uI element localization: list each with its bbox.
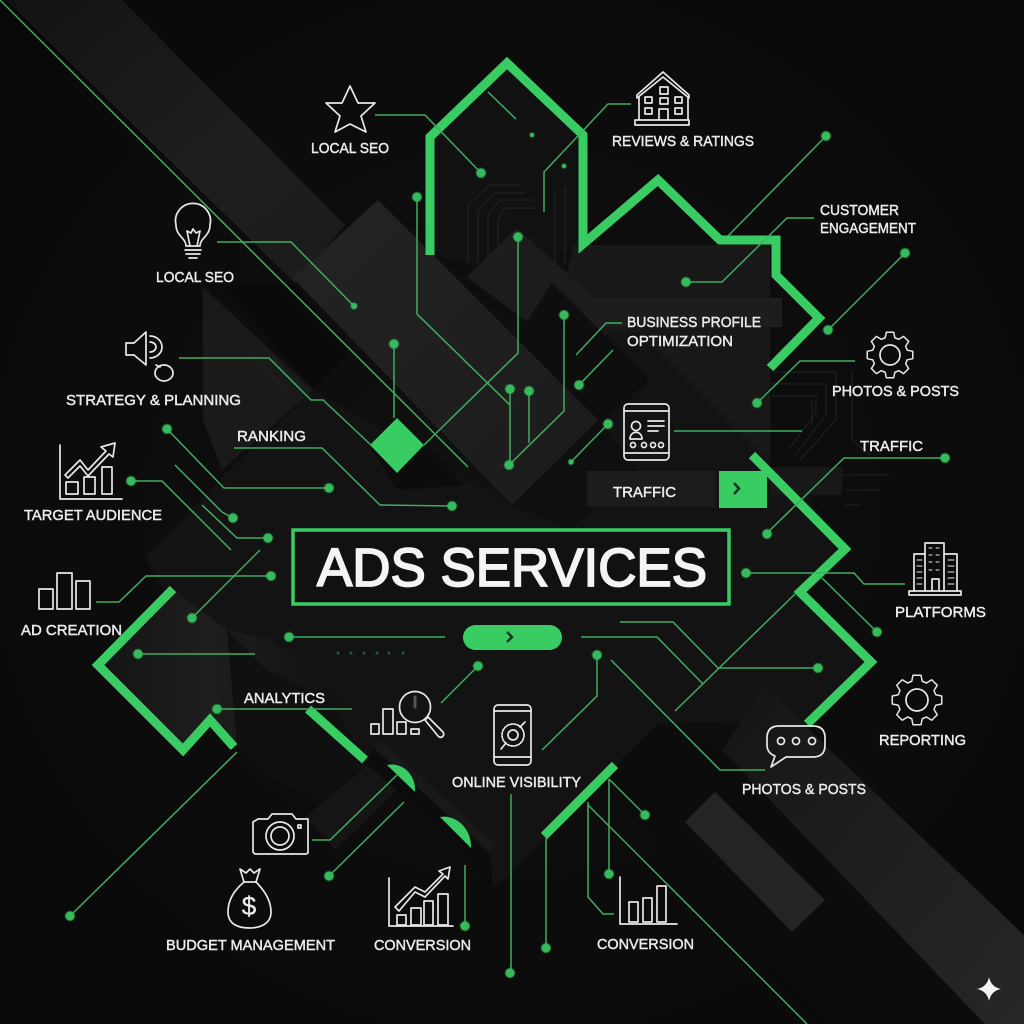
label: conversion right: CONVERSION	[597, 936, 694, 953]
connector: traffic right	[762, 454, 950, 538]
icon: bars	[39, 573, 90, 609]
connector: gear photos	[752, 361, 855, 408]
connector: left diagonal	[188, 550, 260, 622]
green half circle accents	[387, 765, 471, 848]
label: business profile optimization: OPTIMIZATION	[627, 333, 733, 350]
connector: camera	[312, 775, 397, 840]
label: local seo top: LOCAL SEO	[311, 140, 389, 157]
connector: customer engagement	[682, 218, 814, 286]
faint circuit traces	[240, 185, 890, 505]
label: traffic right: TRAFFIC	[860, 438, 923, 455]
connector: bottom vertical	[506, 794, 514, 978]
label: business profile optimization	[627, 314, 761, 350]
label: online visibility: ONLINE VISIBILITY	[452, 774, 581, 791]
connector: centre nodes	[504, 310, 568, 470]
green frame: right outline	[752, 455, 871, 724]
icon: light bulb	[176, 203, 210, 258]
icon: gear reporting	[892, 675, 942, 725]
label: reviews and ratings: REVIEWS & RATINGS	[612, 133, 754, 150]
icon: buildings	[909, 543, 961, 595]
connector: tablet left	[568, 420, 612, 464]
label: traffic bar: TRAFFIC	[613, 484, 676, 501]
icon: speaker and mouse	[126, 332, 173, 381]
icon: money bag	[228, 869, 271, 928]
connector: business profile	[574, 323, 622, 390]
green pill	[463, 625, 562, 650]
title: ADS SERVICES	[317, 538, 707, 598]
label: platforms: PLATFORMS	[895, 604, 986, 621]
label: strategy and planning: STRATEGY & PLANNING	[66, 392, 241, 409]
icon: magnifier chart	[371, 692, 444, 737]
label: conversion left: CONVERSION	[374, 937, 471, 954]
connector: top right	[728, 132, 830, 236]
icon: conversion growth chart	[389, 867, 453, 926]
dotted row	[336, 652, 404, 654]
connector: diamond top	[390, 340, 398, 418]
connector: left frame inner	[134, 650, 255, 658]
icon: camera	[253, 814, 308, 854]
connector: ranking	[234, 448, 456, 510]
connector: bottom left	[66, 752, 237, 920]
connector: lower diagonal	[324, 802, 404, 880]
connector: bulb	[217, 242, 357, 309]
connector: pill left	[284, 632, 445, 642]
connector: tablet	[674, 430, 802, 432]
connector: diamond right	[424, 232, 522, 445]
connector: target audience	[126, 465, 272, 550]
label: reporting: REPORTING	[879, 732, 966, 749]
connector: conversion	[460, 865, 470, 930]
label: business profile optimization: BUSINESS PROFILE	[627, 314, 761, 331]
connector: platforms	[742, 568, 905, 636]
connector: star	[375, 115, 486, 178]
icon: chat bubble	[767, 726, 825, 767]
title box	[293, 530, 729, 604]
connector: bottom frame verticals	[588, 779, 807, 1024]
icon: star	[326, 86, 375, 132]
green frame: bottom segment	[544, 765, 615, 836]
icon: gear photos	[867, 332, 913, 378]
traffic bar	[587, 471, 767, 508]
label: ranking: RANKING	[237, 428, 306, 445]
label: budget management: BUDGET MANAGEMENT	[166, 937, 335, 954]
long diagonal line	[0, 0, 468, 467]
label: analytics: ANALYTICS	[244, 690, 325, 707]
connector: photos and posts bottom	[611, 660, 765, 770]
icon: bar chart	[620, 877, 677, 924]
label: local seo left: LOCAL SEO	[156, 269, 234, 286]
label: photos and posts bottom: PHOTOS & POSTS	[742, 781, 866, 798]
label: ad creation: AD CREATION	[21, 622, 122, 639]
green frame: left outline	[98, 589, 234, 750]
label: customer engagement: CUSTOMER	[820, 202, 899, 219]
dollar sign: $	[242, 891, 257, 921]
icon: growth chart	[60, 443, 122, 499]
house inner details	[488, 92, 566, 168]
icon: house	[635, 72, 689, 125]
connector: magnifier	[441, 662, 482, 703]
connector: upper right	[824, 248, 910, 334]
icon: tablet profile	[624, 404, 669, 460]
label: customer engagement	[820, 202, 916, 237]
label: target audience: TARGET AUDIENCE	[24, 507, 162, 524]
connector: reviews	[544, 104, 631, 212]
icon: sparkle	[977, 977, 1001, 1001]
green frame: top house outline	[430, 63, 819, 368]
connector: pill right	[581, 594, 822, 711]
connector: phone	[542, 650, 602, 750]
connector: bottom frame left	[542, 836, 550, 952]
connector: centre left vertical	[412, 192, 510, 405]
label: photos and posts right: PHOTOS & POSTS	[832, 383, 959, 400]
green frame: analytics segment	[308, 709, 365, 760]
connector: speaker	[179, 358, 372, 446]
connector: upper left node	[162, 424, 334, 492]
connector: ad creation	[96, 572, 276, 602]
icon: smartphone	[494, 705, 531, 765]
green diamond	[370, 418, 424, 473]
connector: analytics	[212, 704, 352, 714]
label: customer engagement: ENGAGEMENT	[820, 220, 916, 237]
